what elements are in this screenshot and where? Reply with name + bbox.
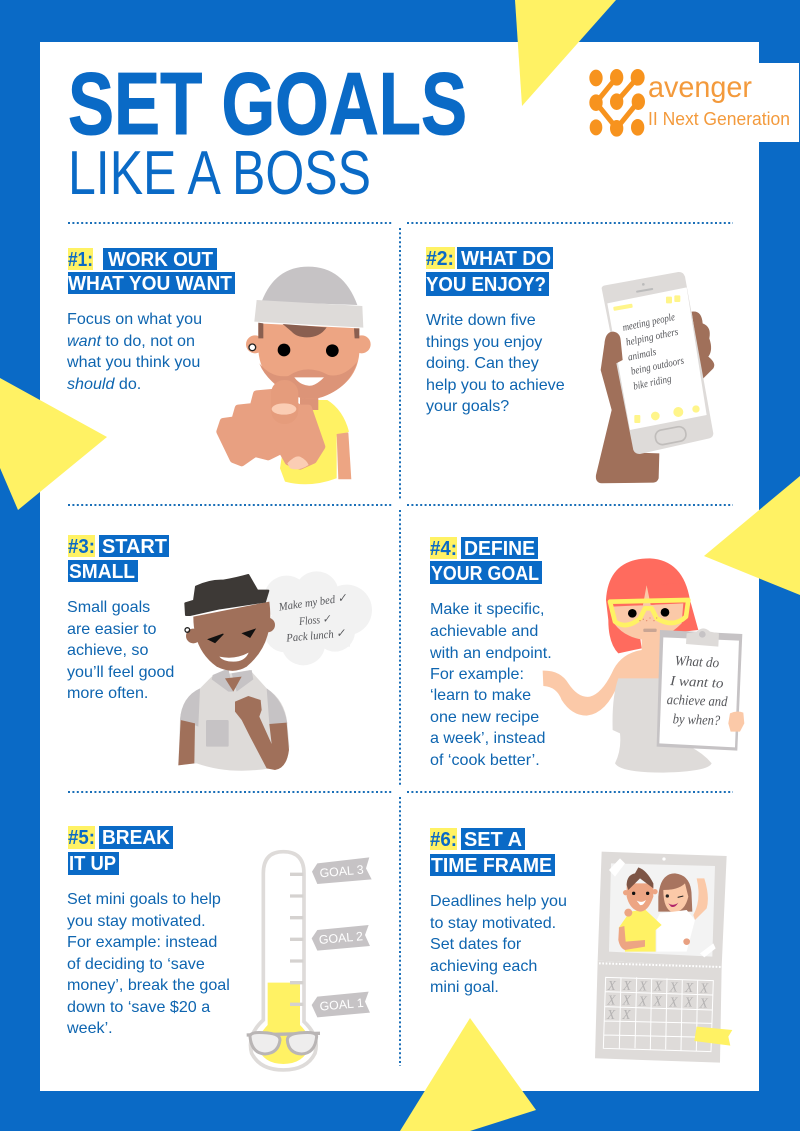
illustration: hand holding phone: bike riding — [632, 374, 673, 393]
heading 6: SET A — [464, 828, 522, 851]
illustration: pointing man — [220, 267, 371, 484]
text 2: Write down five — [426, 311, 536, 329]
text 5: week’. — [66, 1019, 113, 1037]
panel 2: what do you enjoy — [426, 247, 714, 483]
heading 6 — [430, 828, 555, 877]
heading 1: WHAT YOU WANT — [68, 272, 232, 295]
heading 6: TIME FRAME — [431, 854, 552, 877]
text 6: to stay motivated. — [430, 914, 556, 932]
text 4: a week’, instead — [430, 729, 545, 747]
text 6: Set dates for — [430, 935, 522, 953]
text 3: Small goals — [67, 598, 150, 616]
illustration: calendar with photo: X — [684, 980, 694, 995]
title — [68, 54, 467, 208]
heading 5: BREAK — [102, 826, 170, 849]
illustration: calendar with photo: X — [606, 1007, 616, 1022]
text 6: mini goal. — [430, 978, 499, 996]
text 1: should do. — [67, 375, 141, 393]
heading 6: #6: — [430, 828, 457, 851]
illustration: man with thought bubble — [178, 571, 372, 771]
text 3: more often. — [67, 684, 148, 702]
heading 3: START — [102, 535, 167, 558]
heading 2: WHAT DO — [461, 247, 551, 270]
triangle: top — [515, 0, 616, 106]
heading 1 — [68, 248, 235, 295]
panel 5: break it up — [66, 826, 372, 1070]
heading 4: YOUR GOAL — [431, 562, 539, 585]
triangle: bottom — [400, 1018, 536, 1131]
panel 4: define your goal — [429, 537, 744, 773]
illustration: calendar with photo: X — [622, 978, 632, 993]
logo: avenger: avenger — [648, 71, 752, 104]
heading 4: #4: — [430, 537, 457, 560]
text 4: achievable and — [430, 622, 538, 640]
heading 4: DEFINE — [464, 537, 535, 560]
illustration: thermometer: GOAL 1 — [319, 996, 364, 1014]
illustration: calendar with photo: X — [653, 979, 663, 994]
illustration: woman with clipboard: achieve and — [667, 693, 729, 710]
panel 6: set a time frame — [430, 828, 732, 1063]
logo: avenger: II Next Generation — [648, 109, 790, 129]
illustration: calendar with photo: X — [638, 979, 648, 994]
text 4: For example: — [430, 665, 524, 683]
text 5: money’, break the goal — [67, 976, 230, 994]
glasses — [247, 1032, 320, 1054]
heading 3: SMALL — [69, 560, 135, 583]
goal tags — [312, 857, 372, 1017]
text 3: are easier to — [67, 620, 157, 638]
text 2: doing. Can they — [426, 354, 540, 372]
calendar grid — [603, 977, 713, 1052]
text 1: want to do, not on — [67, 332, 195, 350]
text 4: of ‘cook better’. — [430, 751, 540, 769]
title: LIKE A BOSS — [68, 139, 371, 208]
text 5: of deciding to ‘save — [67, 955, 205, 973]
illustration: hand holding phone: animals — [627, 347, 657, 364]
triangle: left — [0, 378, 107, 510]
illustration: thermometer: GOAL 3 — [319, 863, 364, 880]
illustration: calendar with photo: X — [621, 1007, 631, 1022]
panel 3: start small — [67, 535, 372, 771]
illustration: calendar with photo: X — [622, 993, 632, 1008]
heading 2: YOU ENJOY? — [426, 273, 546, 296]
heading 1: WORK OUT — [108, 248, 213, 271]
illustration: thermometer: GOAL 2 — [318, 929, 364, 947]
text 5: down to ‘save $20 a — [67, 998, 210, 1016]
text 6: achieving each — [430, 957, 537, 975]
logo: avenger — [585, 63, 799, 142]
illustration: hand holding phone: helping others — [625, 327, 679, 349]
heading 3: #3: — [68, 535, 95, 558]
illustration: calendar with photo: X — [699, 981, 709, 996]
illustration: calendar with photo: X — [638, 993, 648, 1008]
text 5: Set mini goals to help — [67, 890, 221, 908]
illustration: calendar with photo: X — [684, 995, 694, 1010]
heading 4 — [430, 537, 542, 585]
woman — [658, 873, 692, 912]
illustration: man with thought bubble: Pack lunch ✓ — [285, 628, 346, 645]
illustration: man with thought bubble: Make my bed ✓ — [277, 592, 348, 614]
illustration: calendar with photo: X — [669, 980, 679, 995]
illustration: hand holding phone: being outdoors — [630, 356, 685, 378]
text 6: Deadlines help you — [430, 892, 567, 910]
illustration: calendar with photo: X — [699, 995, 709, 1010]
triangle: right — [704, 476, 800, 595]
text 1: Focus on what you — [67, 310, 202, 328]
heading 3 — [68, 535, 169, 583]
thought bubble — [264, 571, 372, 665]
text 5: you stay motivated. — [67, 912, 206, 930]
text 2: your goals? — [426, 397, 509, 415]
illustration: calendar with photo — [595, 852, 732, 1063]
illustration: thermometer — [247, 852, 372, 1070]
illustration: woman with clipboard: I want to — [669, 674, 724, 692]
illustration: hand holding phone — [596, 272, 714, 483]
text 2: help you to achieve — [426, 376, 565, 394]
text 4: ‘learn to make — [430, 686, 531, 704]
illustration: calendar with photo: X — [668, 994, 678, 1009]
illustration: woman with clipboard — [543, 558, 744, 773]
heading 1: #1: — [68, 248, 93, 271]
heading 2 — [426, 247, 553, 296]
text 5: For example: instead — [67, 933, 217, 951]
illustration: calendar with photo: X — [606, 993, 616, 1008]
illustration: woman with clipboard: by when? — [673, 712, 720, 729]
man — [618, 909, 662, 952]
heading 5: IT UP — [69, 852, 116, 875]
text 4: one new recipe — [430, 708, 539, 726]
title: SET GOALS — [68, 54, 467, 153]
panel 1: work out what you want — [66, 248, 371, 484]
text 1: what you think you — [66, 353, 200, 371]
text 3: you’ll feel good — [67, 663, 174, 681]
text 3: achieve, so — [67, 641, 148, 659]
heading 5: #5: — [68, 826, 95, 849]
illustration: hand holding phone: meeting people — [622, 312, 676, 334]
illustration: woman with clipboard: What do — [674, 654, 720, 671]
text 4: with an endpoint. — [429, 644, 552, 662]
heading 5 — [68, 826, 173, 875]
illustration: calendar with photo: X — [653, 993, 663, 1008]
illustration: man with thought bubble: Floss ✓ — [298, 613, 332, 628]
heading 2: #2: — [426, 247, 454, 270]
illustration: calendar with photo: X — [607, 978, 617, 993]
text 2: things you enjoy — [426, 333, 543, 351]
text 4: Make it specific, — [430, 600, 544, 618]
